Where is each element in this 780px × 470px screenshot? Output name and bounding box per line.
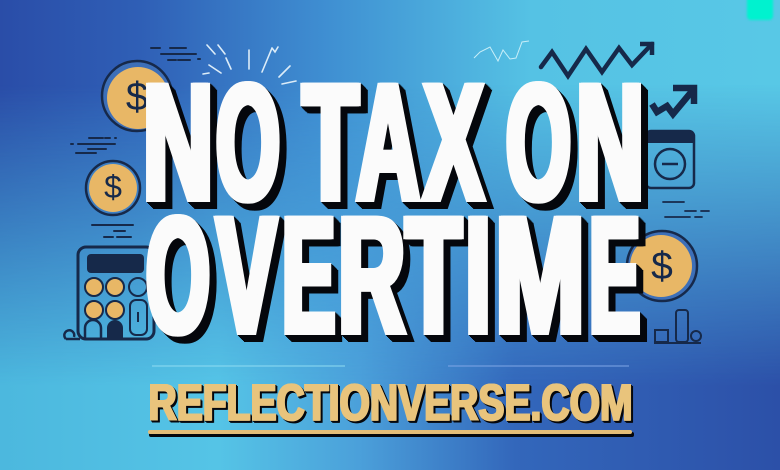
title [141,50,642,368]
title line 2: O [144,184,208,368]
icon: coin right [627,231,697,301]
icon: coin right: $ [651,245,673,288]
text: E [587,184,638,368]
icon: coin medium [86,161,140,215]
title line 1: O [214,50,278,236]
icon: dash lines top left [151,48,200,60]
icon: calculator [64,247,154,339]
divider lines [152,365,629,367]
title line 2: V [214,184,274,368]
title line 2: R [336,184,403,368]
title line 1: T [301,50,356,236]
website underline [148,430,634,437]
title line 2 [144,184,638,368]
title line 2: E [280,184,333,368]
title line 2: I [463,184,489,368]
icon: trend arrow [652,88,694,114]
title line 1: N [141,50,211,236]
thin sketch line [474,41,529,61]
title line 1: A [354,50,418,236]
title line 2: M [493,184,583,368]
icon: zigzag arrow [541,44,652,76]
icon: coin large [102,61,172,131]
icon: card with minus [646,131,694,188]
icon: coin medium: $ [104,169,122,205]
title line 2: T [404,184,459,368]
icon: dash lines right [663,202,709,217]
title line 1: O [504,50,569,236]
icon: coin large: $ [126,75,148,119]
title line 1: X [421,50,481,236]
green corner blob [747,0,773,20]
icon: small bars [654,310,701,343]
icon: dash lines above calculator [92,225,133,237]
title line 1: N [574,50,642,236]
website text: REFLECTIONVERSE.COM [148,374,632,431]
icon: dash lines middle left [71,138,116,153]
icon: burst lines [203,45,296,84]
title line 1 [141,50,642,236]
